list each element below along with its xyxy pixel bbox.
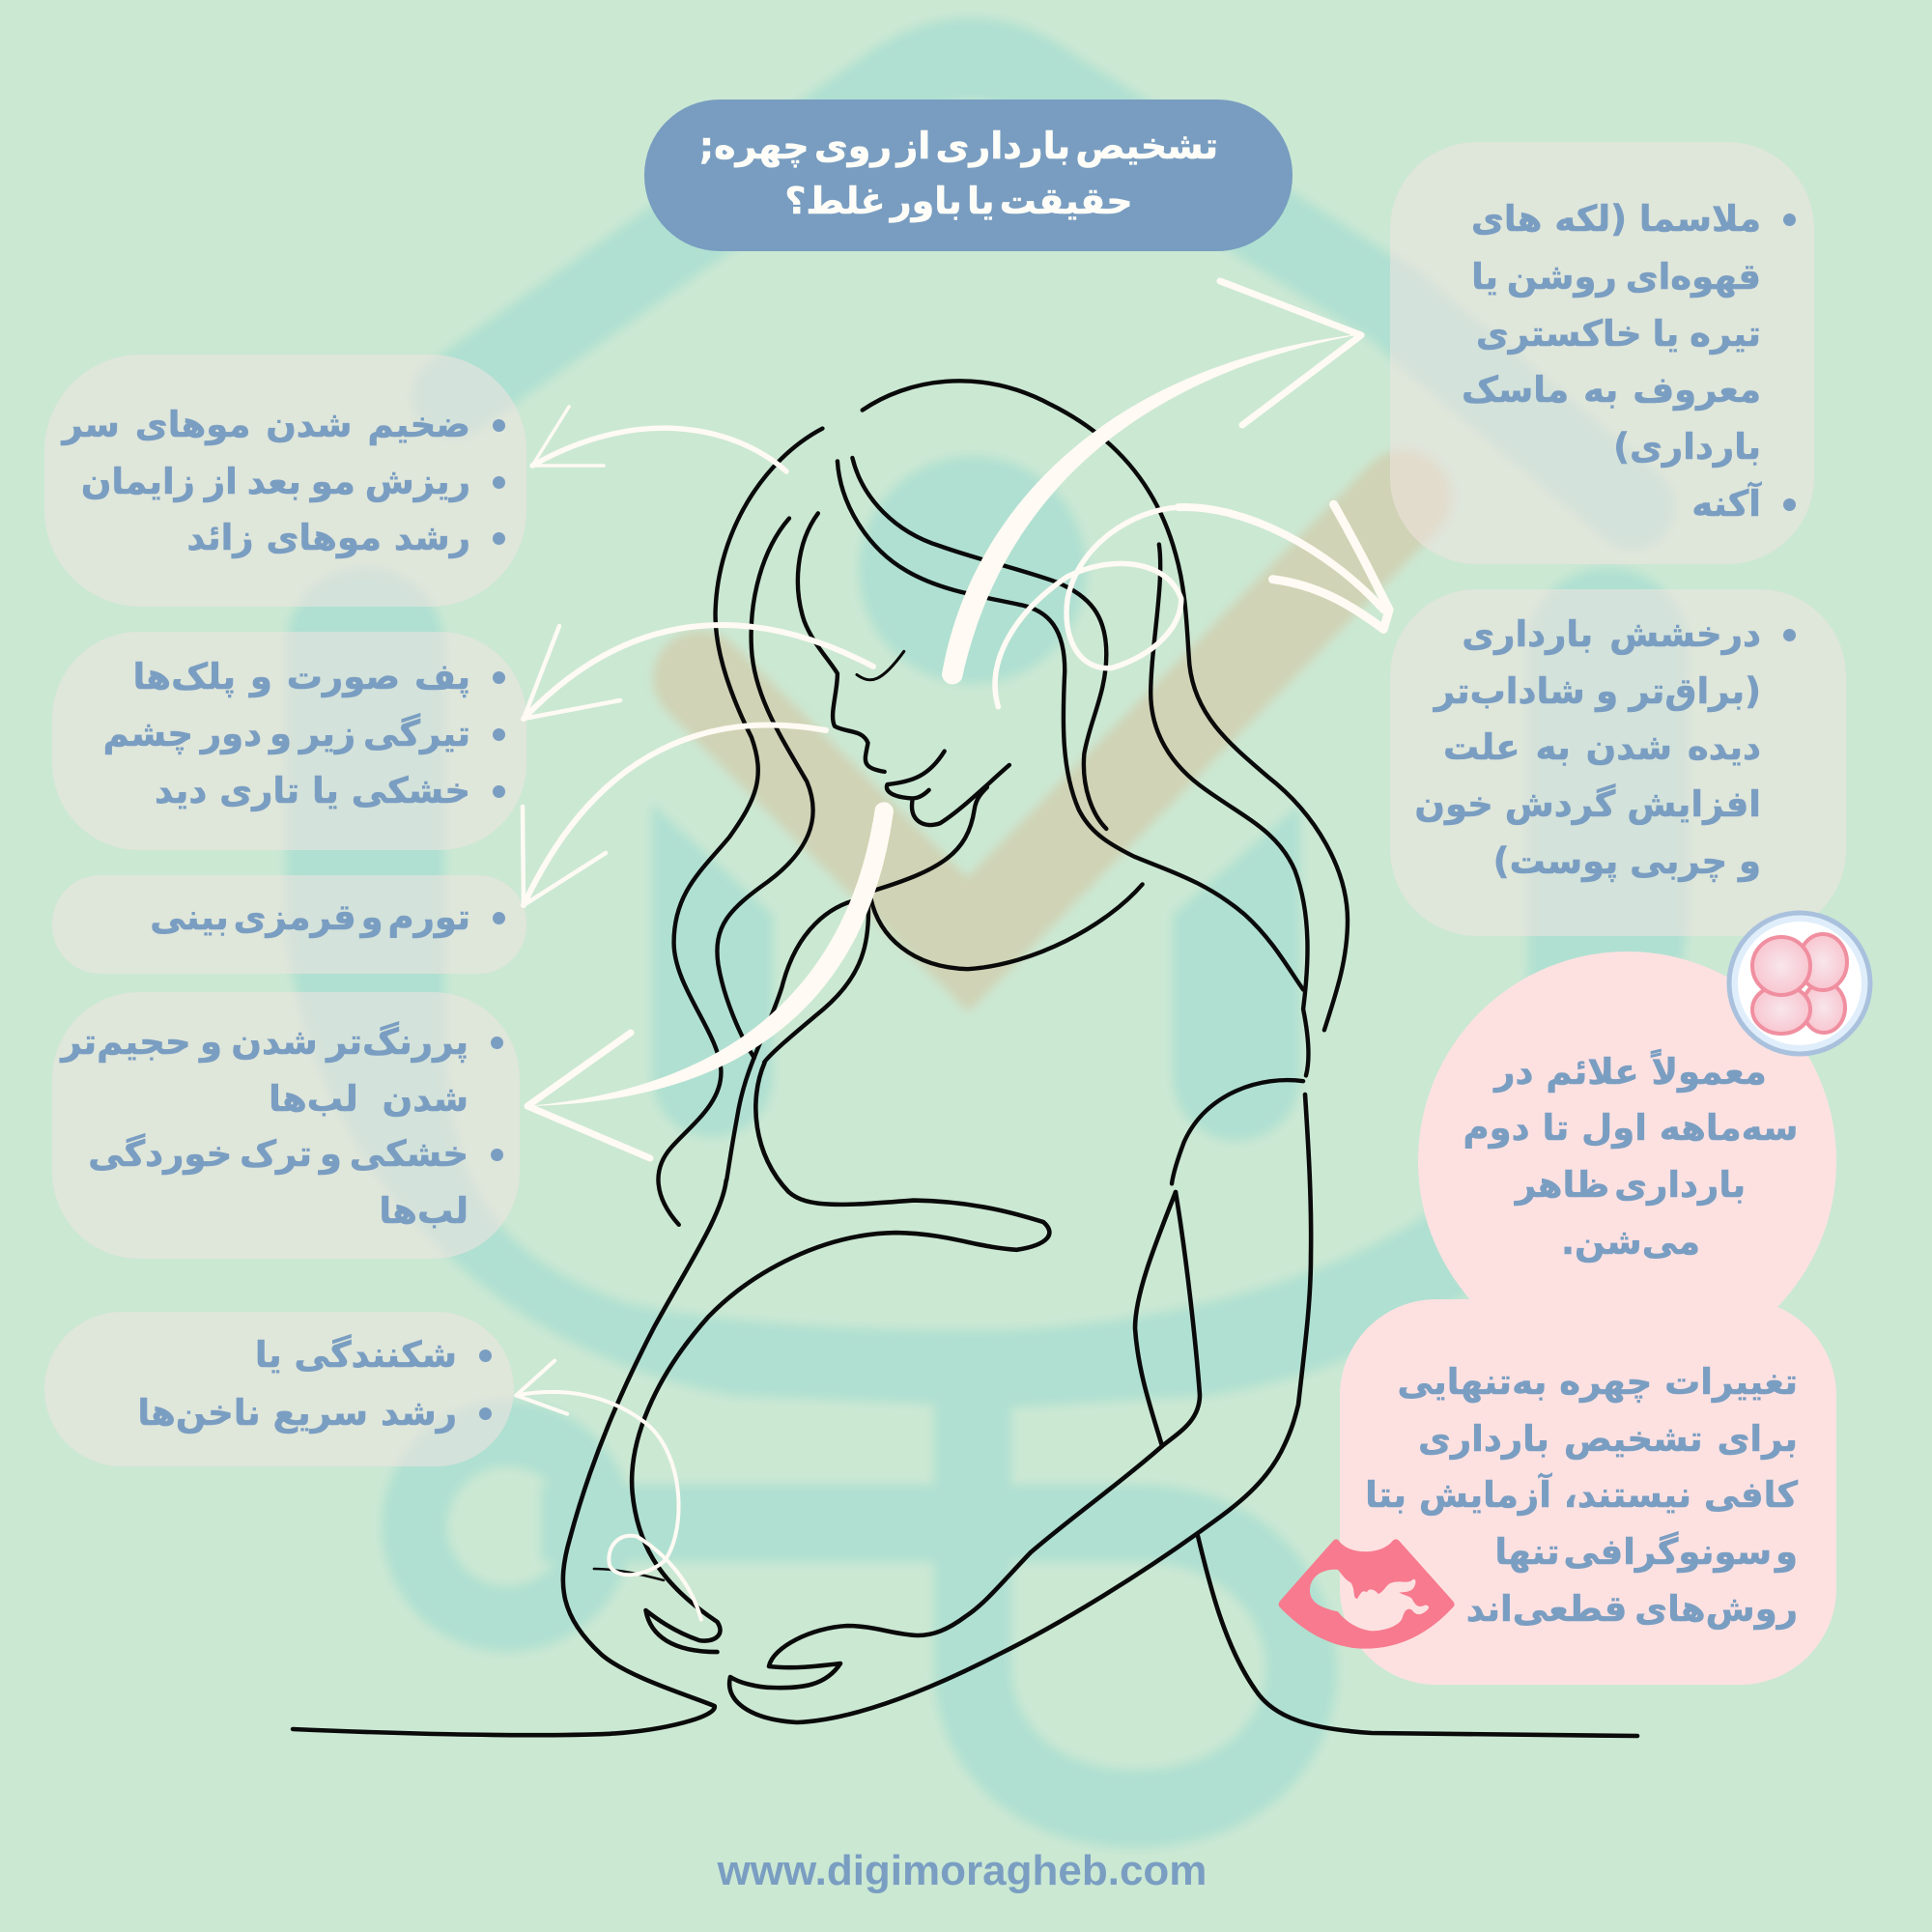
line art: left arm, belly and ground (293, 1063, 1049, 1735)
glow line 2: (براق‌تر و شاداب‌تر (1435, 670, 1761, 712)
panel: lips (52, 992, 520, 1259)
nail symptom 1: شکنندگی یا (255, 1334, 457, 1376)
glow line 4: افزایش گردش خون (1414, 783, 1761, 825)
glow line 5: و چربی پوست) (1493, 840, 1761, 882)
panel: nose (52, 875, 526, 974)
arrow: to lips panel (527, 802, 894, 1158)
melasma line 2: قهوه‌ای روشن یا (1471, 256, 1761, 298)
lip symptom line 4: لب‌ها (379, 1190, 469, 1232)
arrow: to melasma panel (942, 281, 1367, 684)
hair symptom 2: ریزش مو بعد از زایمان (81, 461, 470, 502)
panel: hair (44, 355, 526, 607)
nose symptom: تورم و قرمزی بینی (150, 896, 470, 938)
lip symptom line 2: شدن لب‌ها (269, 1078, 469, 1120)
test note line 2: برای تشخیص بارداری (1418, 1418, 1798, 1460)
panel: melasma (1390, 142, 1814, 564)
melasma line 1: ملاسما (لکه های (1471, 198, 1761, 240)
arrow: to nails panel (516, 1361, 701, 1620)
lip symptom line 3: خشکی و ترک خوردگی (88, 1133, 469, 1175)
melasma line 5: بارداری) (1613, 426, 1761, 468)
timing note line 2: سه‌ماهه اول تا دوم (1463, 1107, 1799, 1149)
timing note line 3: بارداری ظاهر (1516, 1164, 1746, 1206)
glow line 1: درخشش بارداری (1462, 613, 1761, 655)
eye symptom 3: خشکی یا تاری دید (155, 770, 470, 811)
melasma line 3: تیره یا خاکستری (1476, 313, 1761, 355)
title line 1: تشخیص بارداری از روی چهره; (699, 125, 1218, 167)
arrow: to nose panel (523, 725, 826, 905)
panel: nails (44, 1312, 514, 1466)
panel: pink notes (1340, 952, 1836, 1685)
hair symptom 1: ضخیم شدن موهای سر (62, 404, 470, 445)
test note line 3: کافی نیستند، آزمایش بتا (1365, 1474, 1798, 1516)
footer website: www.digimoragheb.com (718, 1847, 1207, 1894)
timing note line 4: می‌شن. (1561, 1221, 1700, 1263)
melasma line 4: معروف به ماسک (1462, 369, 1761, 411)
test note line 1: تغییرات چهره به‌تنهایی (1397, 1361, 1798, 1403)
arrow: to hair panel (532, 407, 786, 471)
panel: eyes (52, 632, 526, 850)
acne: آکنه (1691, 483, 1761, 525)
arrow: to glow panel (995, 504, 1389, 707)
pink rounded backing (1340, 1299, 1836, 1685)
lip symptom line 1: پررنگ‌تر شدن و حجیم‌تر (61, 1021, 469, 1063)
timing note line 1: معمولاً علائم در (1494, 1051, 1767, 1093)
line art: right arm, hand and leg (729, 1094, 1637, 1736)
line art: head, hair and face (658, 381, 1348, 1225)
eye symptom 1: پف صورت و پلک‌ها (133, 656, 470, 697)
title line 2: حقیقت یا باور غلط؟ (784, 180, 1133, 222)
hair symptom 3: رشد موهای زائد (186, 517, 470, 558)
nail symptom 2: رشد سریع ناخن‌ها (137, 1392, 457, 1434)
arrow: to eye panel (524, 625, 873, 719)
pink circle backing (1418, 952, 1836, 1371)
test note line 4: و سونوگرافی تنها (1494, 1531, 1798, 1573)
glow line 3: دیده شدن به علت (1443, 726, 1761, 768)
eye symptom 2: تیرگی زیر و دور چشم (103, 713, 470, 754)
panel: pregnancy glow (1390, 589, 1846, 936)
test note line 5: روش‌های قطعی‌اند (1466, 1588, 1798, 1630)
title pill (644, 99, 1293, 251)
